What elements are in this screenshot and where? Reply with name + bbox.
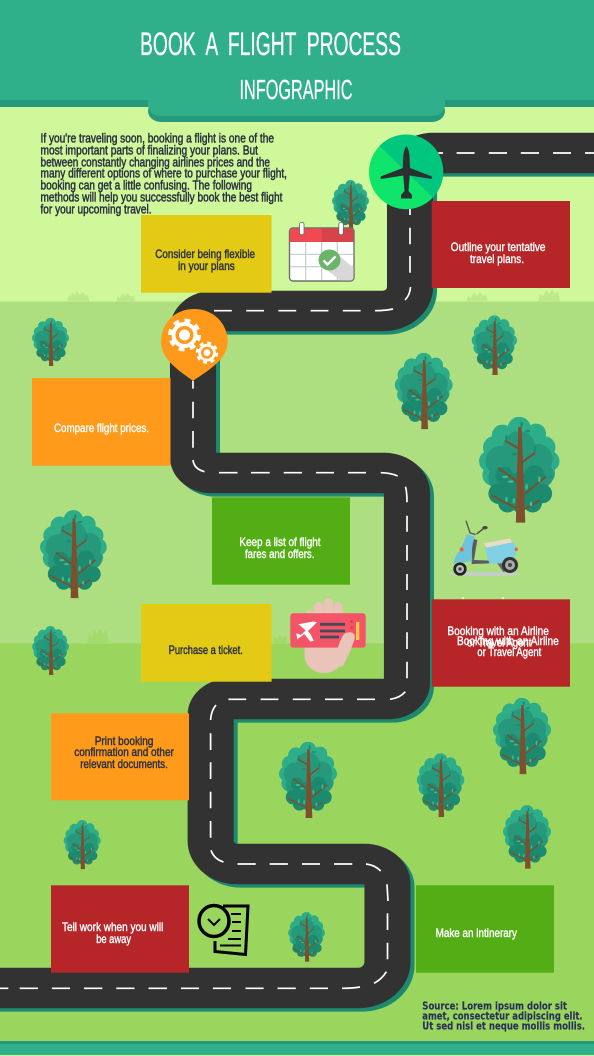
icon: calendar — [290, 222, 354, 281]
tree: inside the road bend — [288, 912, 325, 962]
box: outline your tentative travel plans: Outline your tentative — [451, 240, 546, 254]
tree: bottom left — [64, 820, 101, 869]
icon: clock and document — [199, 906, 248, 954]
box: tell work when you will be away — [51, 885, 189, 973]
tree: upper right centre — [395, 353, 453, 429]
background: middle field — [0, 289, 594, 646]
road — [0, 153, 594, 991]
box: outline your tentative travel plans: travel plans. — [470, 252, 524, 266]
title line 2: INFOGRAPHIC — [240, 74, 352, 105]
intro text: booking can get a little confusing. The following — [40, 178, 252, 192]
intro text: most important parts of finalizing your plans. But — [40, 144, 258, 158]
box: consider being flexible: Consider being flexible — [155, 247, 255, 261]
box: keep a list of flight fares: Keep a list of flight — [239, 535, 321, 549]
box: purchase a ticket — [141, 604, 272, 682]
intro text: for your upcoming travel. — [40, 202, 152, 216]
road centre dashes — [0, 153, 594, 988]
background: lower field — [0, 628, 594, 1042]
source note — [422, 1000, 585, 1032]
box: print booking confirmation: relevant documents. — [80, 757, 168, 771]
box: keep a list of flight fares — [212, 497, 350, 585]
box: keep a list of flight fares: fares and offers. — [245, 547, 314, 561]
box: booking with an airline or travel agent: or Travel Agent — [477, 645, 542, 659]
box: print booking confirmation: Print booking — [95, 734, 153, 748]
tree: lower left — [32, 626, 69, 675]
trees — [32, 180, 560, 962]
tree: behind calendar — [332, 180, 369, 230]
header banner — [0, 0, 594, 122]
box: compare flight prices: Compare flight prices. — [54, 421, 149, 435]
tree: lower right — [503, 805, 551, 869]
box: tell work when you will be away: be away — [96, 932, 131, 946]
tree: lower right top — [493, 698, 551, 774]
box: booking with an airline or travel agent: Booking with an Airline — [447, 624, 549, 638]
large gear — [170, 321, 198, 349]
tree: upper right — [472, 315, 517, 375]
text fragments above booking box — [463, 597, 503, 600]
box: booking with an airline or travel agent: Booking with an Airline — [457, 634, 559, 648]
tree: upper left — [32, 318, 69, 366]
icon: hand holding ticket — [290, 598, 366, 673]
box: booking with an airline or travel agent: or Travel Agent — [467, 636, 532, 650]
box: booking with an airline or travel agent — [432, 599, 570, 687]
title line 1: BOOK A FLIGHT PROCESS — [140, 26, 401, 62]
box: outline your tentative travel plans — [432, 201, 570, 288]
tree: lower centre — [279, 742, 337, 818]
box: print booking confirmation: confirmation and other — [74, 745, 174, 759]
icon: gears pin — [161, 309, 228, 381]
icon: plane marker — [369, 135, 443, 209]
tree: lower centre right — [417, 753, 464, 817]
box: make an itinerary: Make an intinerary — [436, 926, 517, 940]
box: print booking confirmation — [51, 713, 189, 800]
small gear — [197, 343, 217, 362]
box: purchase a ticket: Purchase a ticket. — [169, 643, 243, 657]
intro text — [40, 132, 287, 216]
box: compare flight prices — [32, 378, 170, 466]
box: consider being flexible: in your plans — [178, 259, 235, 273]
background: sky — [0, 100, 594, 305]
intro text: many different options of where to purchase your flight, — [40, 166, 287, 180]
box: tell work when you will be away: Tell work when you will — [62, 920, 163, 934]
box: consider being flexible — [141, 215, 272, 293]
icon: scooter — [448, 521, 522, 576]
footer band — [0, 1041, 594, 1055]
intro text: If you're traveling soon, booking a flight is one of the — [40, 132, 274, 146]
intro text: between constantly changing airlines prices and the — [40, 156, 270, 170]
tree: large right — [479, 417, 560, 523]
intro text: methods will help you successfully book the best flight — [40, 190, 283, 204]
tree: middle left — [40, 510, 107, 598]
box: make an itinerary — [416, 885, 554, 973]
